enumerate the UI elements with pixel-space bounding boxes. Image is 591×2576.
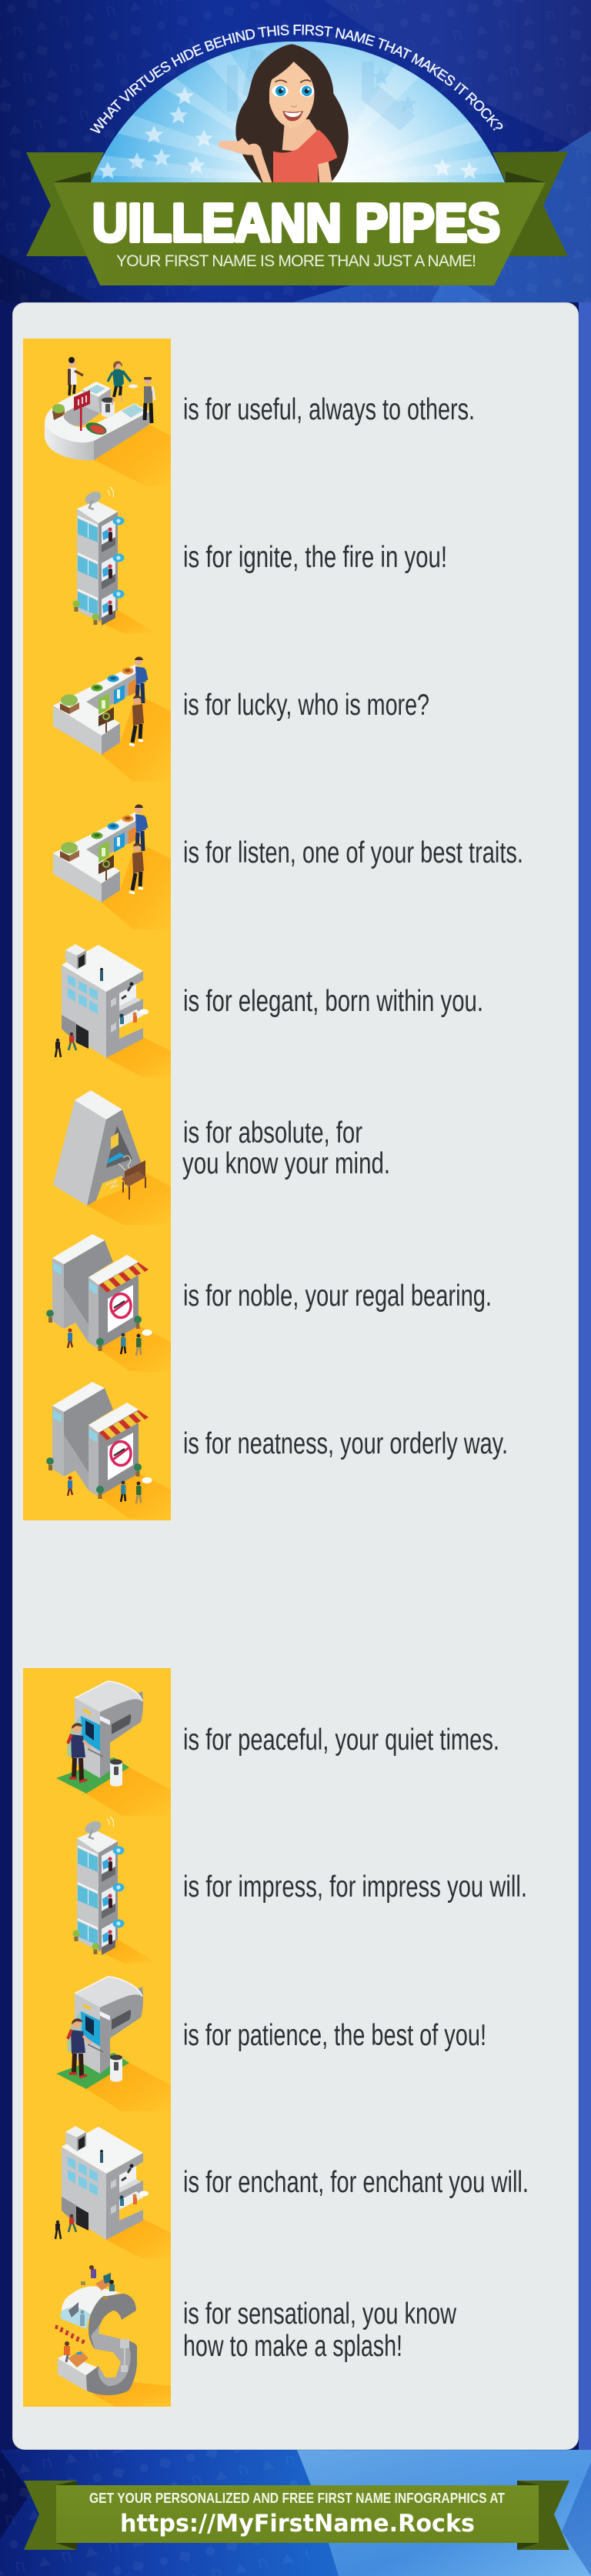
illustration: I [72, 1817, 155, 1964]
panel: letters [12, 302, 579, 2450]
dome with sunburst and stars [91, 42, 505, 182]
text: N line: is for noble, your regal bearing. [183, 1280, 492, 1313]
footer ribbon [24, 2481, 569, 2550]
illustration: I [72, 487, 155, 634]
illustration: P repeated [56, 1977, 171, 2111]
footer line 1: GET YOUR PERSONALIZED AND FREE FIRST NAME INFOGRAPHICS AT [89, 2491, 505, 2506]
illustration: U [45, 357, 171, 486]
background: footer [0, 2450, 591, 2576]
letter tile column 2 [23, 1668, 171, 2407]
text: P line 2: is for patience, the best of you! [183, 2019, 486, 2052]
banner: back tails [26, 152, 568, 256]
title: UILLEANN PIPES [92, 192, 500, 252]
illustration: E [55, 944, 171, 1077]
text: A lines [182, 1116, 390, 1180]
text: S lines: is for sensational, you know [183, 2297, 457, 2331]
illustration: woman [218, 44, 349, 182]
illustration: S [53, 2265, 171, 2407]
footer url: https://MyFirstName.Rocks [120, 2510, 475, 2538]
illustration: L repeated [53, 805, 171, 929]
text: S lines [183, 2297, 457, 2363]
text: A lines: is for absolute, for [183, 1116, 362, 1150]
text: U line: is for useful, always to others. [183, 393, 475, 426]
background: header [0, 0, 591, 302]
illustration: N [46, 1234, 171, 1373]
illustration: E [55, 2126, 171, 2259]
text: I line: is for ignite, the fire in you! [183, 541, 447, 574]
illustration: L [53, 657, 171, 782]
curved tagline: WHAT VIRTUES HIDE BEHIND THIS FIRST NAME THAT MAKES IT ROCK? [89, 25, 503, 134]
illustration: A [53, 1090, 171, 1225]
text: A lines: you know your mind. [182, 1147, 390, 1180]
text: L line: is for lucky, who is more? [183, 689, 429, 722]
letter tile column 1 [23, 339, 171, 1520]
text: S lines: how to make a splash! [183, 2330, 402, 2363]
subtitle: YOUR FIRST NAME IS MORE THAN JUST A NAME! [116, 252, 476, 270]
banner: front ribbon [53, 182, 546, 285]
text: E line: is for elegant, born within you. [183, 985, 483, 1018]
illustration: N repeated [46, 1382, 171, 1520]
illustration: P [56, 1681, 171, 1816]
